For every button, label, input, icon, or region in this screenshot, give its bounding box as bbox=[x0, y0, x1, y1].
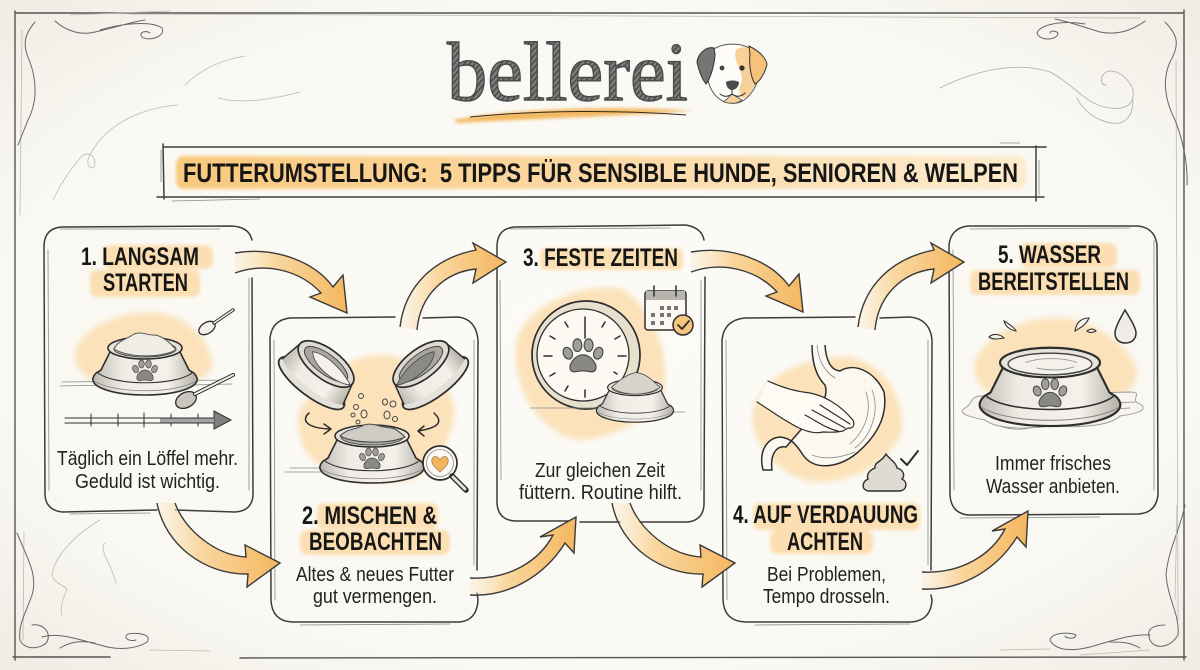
falling kibble bbox=[351, 394, 398, 424]
hand bbox=[757, 381, 854, 433]
step 2 heading: 2. MISCHEN & bbox=[302, 502, 437, 530]
arrow: step 2 to 3 below bbox=[470, 517, 576, 595]
logo underline stroke bbox=[453, 108, 693, 123]
step 4 heading: 4. AUF VERDAUUNG bbox=[733, 501, 918, 529]
step 2 text bbox=[296, 564, 454, 608]
step 4 text bbox=[763, 564, 890, 608]
panel: step 5 Wasser bereitstellen bbox=[949, 226, 1158, 518]
illustration: mixing two bowls bbox=[272, 328, 475, 490]
step 5 text: Wasser anbieten. bbox=[986, 476, 1120, 498]
bowl bbox=[980, 348, 1120, 426]
step 3 text: Zur gleichen Zeit bbox=[535, 460, 665, 482]
panel: step 3 Feste Zeiten bbox=[497, 225, 705, 522]
step 1 heading: STARTEN bbox=[103, 269, 188, 297]
clock with paw bbox=[532, 301, 640, 409]
step 4 heading bbox=[733, 501, 918, 556]
arrow: step 3 to 4 below bbox=[612, 503, 735, 587]
illustration: bowl with spoons and timeline bbox=[60, 310, 233, 429]
icon: poop with check bbox=[863, 451, 918, 491]
panel: step 1 Langsam starten bbox=[44, 226, 253, 514]
step 5 heading: BEREITSTELLEN bbox=[978, 268, 1129, 296]
small food bowl bbox=[596, 373, 674, 422]
step 4 text: Tempo drosseln. bbox=[763, 586, 890, 608]
arrow: step 2 to 3 over the top bbox=[400, 243, 506, 330]
arrow: step 4 to 5 over the top bbox=[858, 243, 964, 330]
step 2 heading bbox=[302, 502, 442, 556]
step 1 text: Geduld ist wichtig. bbox=[75, 471, 220, 493]
icon: dog head bbox=[697, 44, 767, 103]
step 1 heading bbox=[81, 243, 199, 297]
heading highlight bbox=[540, 248, 683, 270]
step 3 heading: 3. FESTE ZEITEN bbox=[523, 244, 678, 272]
title banner bbox=[157, 143, 1046, 201]
icon: calendar with check bbox=[645, 286, 693, 335]
step 5 heading: 5. WASSER bbox=[998, 241, 1101, 269]
puddle bbox=[962, 392, 1143, 428]
logo: bellerei wordmark with dog bbox=[447, 26, 767, 123]
step 1 heading: 1. LANGSAM bbox=[81, 243, 199, 271]
logo wordmark: bellerei bbox=[447, 26, 688, 119]
illustration: stomach and hand bbox=[752, 345, 918, 491]
heading highlight bbox=[970, 243, 1140, 295]
step 4 heading: ACHTEN bbox=[787, 528, 863, 556]
arrow: step 3 to 4 over the top bbox=[691, 250, 803, 312]
stomach bbox=[762, 345, 885, 470]
left tilted bowl bbox=[272, 328, 367, 418]
step 2 text: Altes & neues Futter bbox=[296, 564, 454, 586]
right tilted bowl bbox=[380, 328, 475, 418]
arrow: step 1 to 2 over the top bbox=[235, 251, 347, 313]
heading highlight bbox=[90, 245, 213, 297]
arrow: step 1 to 2 below bbox=[157, 503, 280, 587]
panel: step 4 Auf Verdauung achten bbox=[722, 317, 932, 625]
title text: FUTTERUMSTELLUNG: 5 TIPPS FÜR SENSIBLE HUNDE, SENIOREN & WELPEN bbox=[183, 158, 1018, 188]
arrow: step 4 to 5 below bbox=[922, 511, 1028, 589]
heading highlight bbox=[300, 503, 450, 555]
panel: step 2 Mischen und Beobachten bbox=[270, 317, 478, 625]
illustration: water bowl bbox=[962, 310, 1143, 429]
step 5 text bbox=[986, 453, 1120, 498]
icon: large spoon bbox=[173, 375, 233, 412]
step 4 text: Bei Problemen, bbox=[767, 564, 886, 586]
icon: magnifier with heart bbox=[423, 446, 466, 490]
step 2 heading: BEOBACHTEN bbox=[309, 528, 442, 556]
step 1 text: Täglich ein Löffel mehr. bbox=[57, 448, 238, 470]
icon: small spoon bbox=[196, 310, 233, 337]
illustration: clock, bowl, calendar bbox=[516, 286, 693, 440]
step 2 text: gut vermengen. bbox=[313, 586, 437, 608]
step 5 heading bbox=[978, 241, 1129, 296]
icon: water drop bbox=[1115, 310, 1136, 343]
step 3 text: füttern. Routine hilft. bbox=[519, 482, 682, 504]
step 5 text: Immer frisches bbox=[995, 453, 1111, 475]
step 1 text bbox=[57, 448, 238, 493]
step 3 text bbox=[519, 460, 682, 504]
heading highlight bbox=[753, 503, 920, 554]
timeline arrow bbox=[65, 411, 231, 429]
water splashes bbox=[989, 318, 1096, 339]
mixing arrows bbox=[305, 413, 439, 436]
